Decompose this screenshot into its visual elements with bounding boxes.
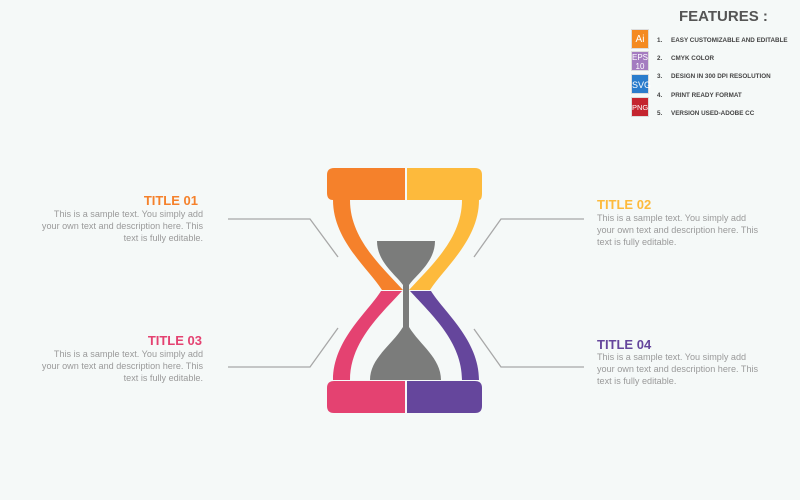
features list [631,29,788,117]
text 02: text is fully editable. [597,237,676,247]
features list: 2. CMYK COLOR [657,55,714,62]
text 03: your own text and description here. This [42,361,203,371]
text 02 [597,213,758,247]
text 01: text is fully editable. [124,233,203,243]
text 01: This is a sample text. You simply add [54,209,203,219]
icon: PNG [631,97,649,117]
title 02: TITLE 02 [597,197,651,212]
text 03: This is a sample text. You simply add [54,349,203,359]
icon: Ai [631,29,649,49]
features list: 5. VERSION USED-ADOBE CC [657,110,754,117]
title 04: TITLE 04 [597,337,651,352]
features list: 3. DESIGN IN 300 DPI RESOLUTION [657,73,771,80]
icon: EPS: EPS [632,53,648,62]
connector lines [228,219,584,367]
hourglass [327,168,482,413]
features list: 4. PRINT READY FORMAT [657,92,742,99]
icon: EPS: 10 [636,62,644,71]
features heading: FEATURES : [679,8,768,25]
title 01: TITLE 01 [144,193,198,208]
icon: SVG: SVG [632,80,651,90]
text 02: This is a sample text. You simply add [597,213,746,223]
text 01: your own text and description here. This [42,221,203,231]
text 04 [597,352,758,386]
text 04: text is fully editable. [597,376,676,386]
title 03: TITLE 03 [148,333,202,348]
icon: SVG [631,74,649,94]
features list: 1. EASY CUSTOMIZABLE AND EDITABLE [657,37,788,44]
icon: EPS [631,51,649,71]
icon: PNG: PNG [632,103,648,112]
icon: Ai: Ai [636,34,644,45]
text 01 [42,209,203,243]
text 04: This is a sample text. You simply add [597,352,746,362]
text 03: text is fully editable. [124,373,203,383]
text 04: your own text and description here. This [597,364,758,374]
text 03 [42,349,203,383]
text 02: your own text and description here. This [597,225,758,235]
